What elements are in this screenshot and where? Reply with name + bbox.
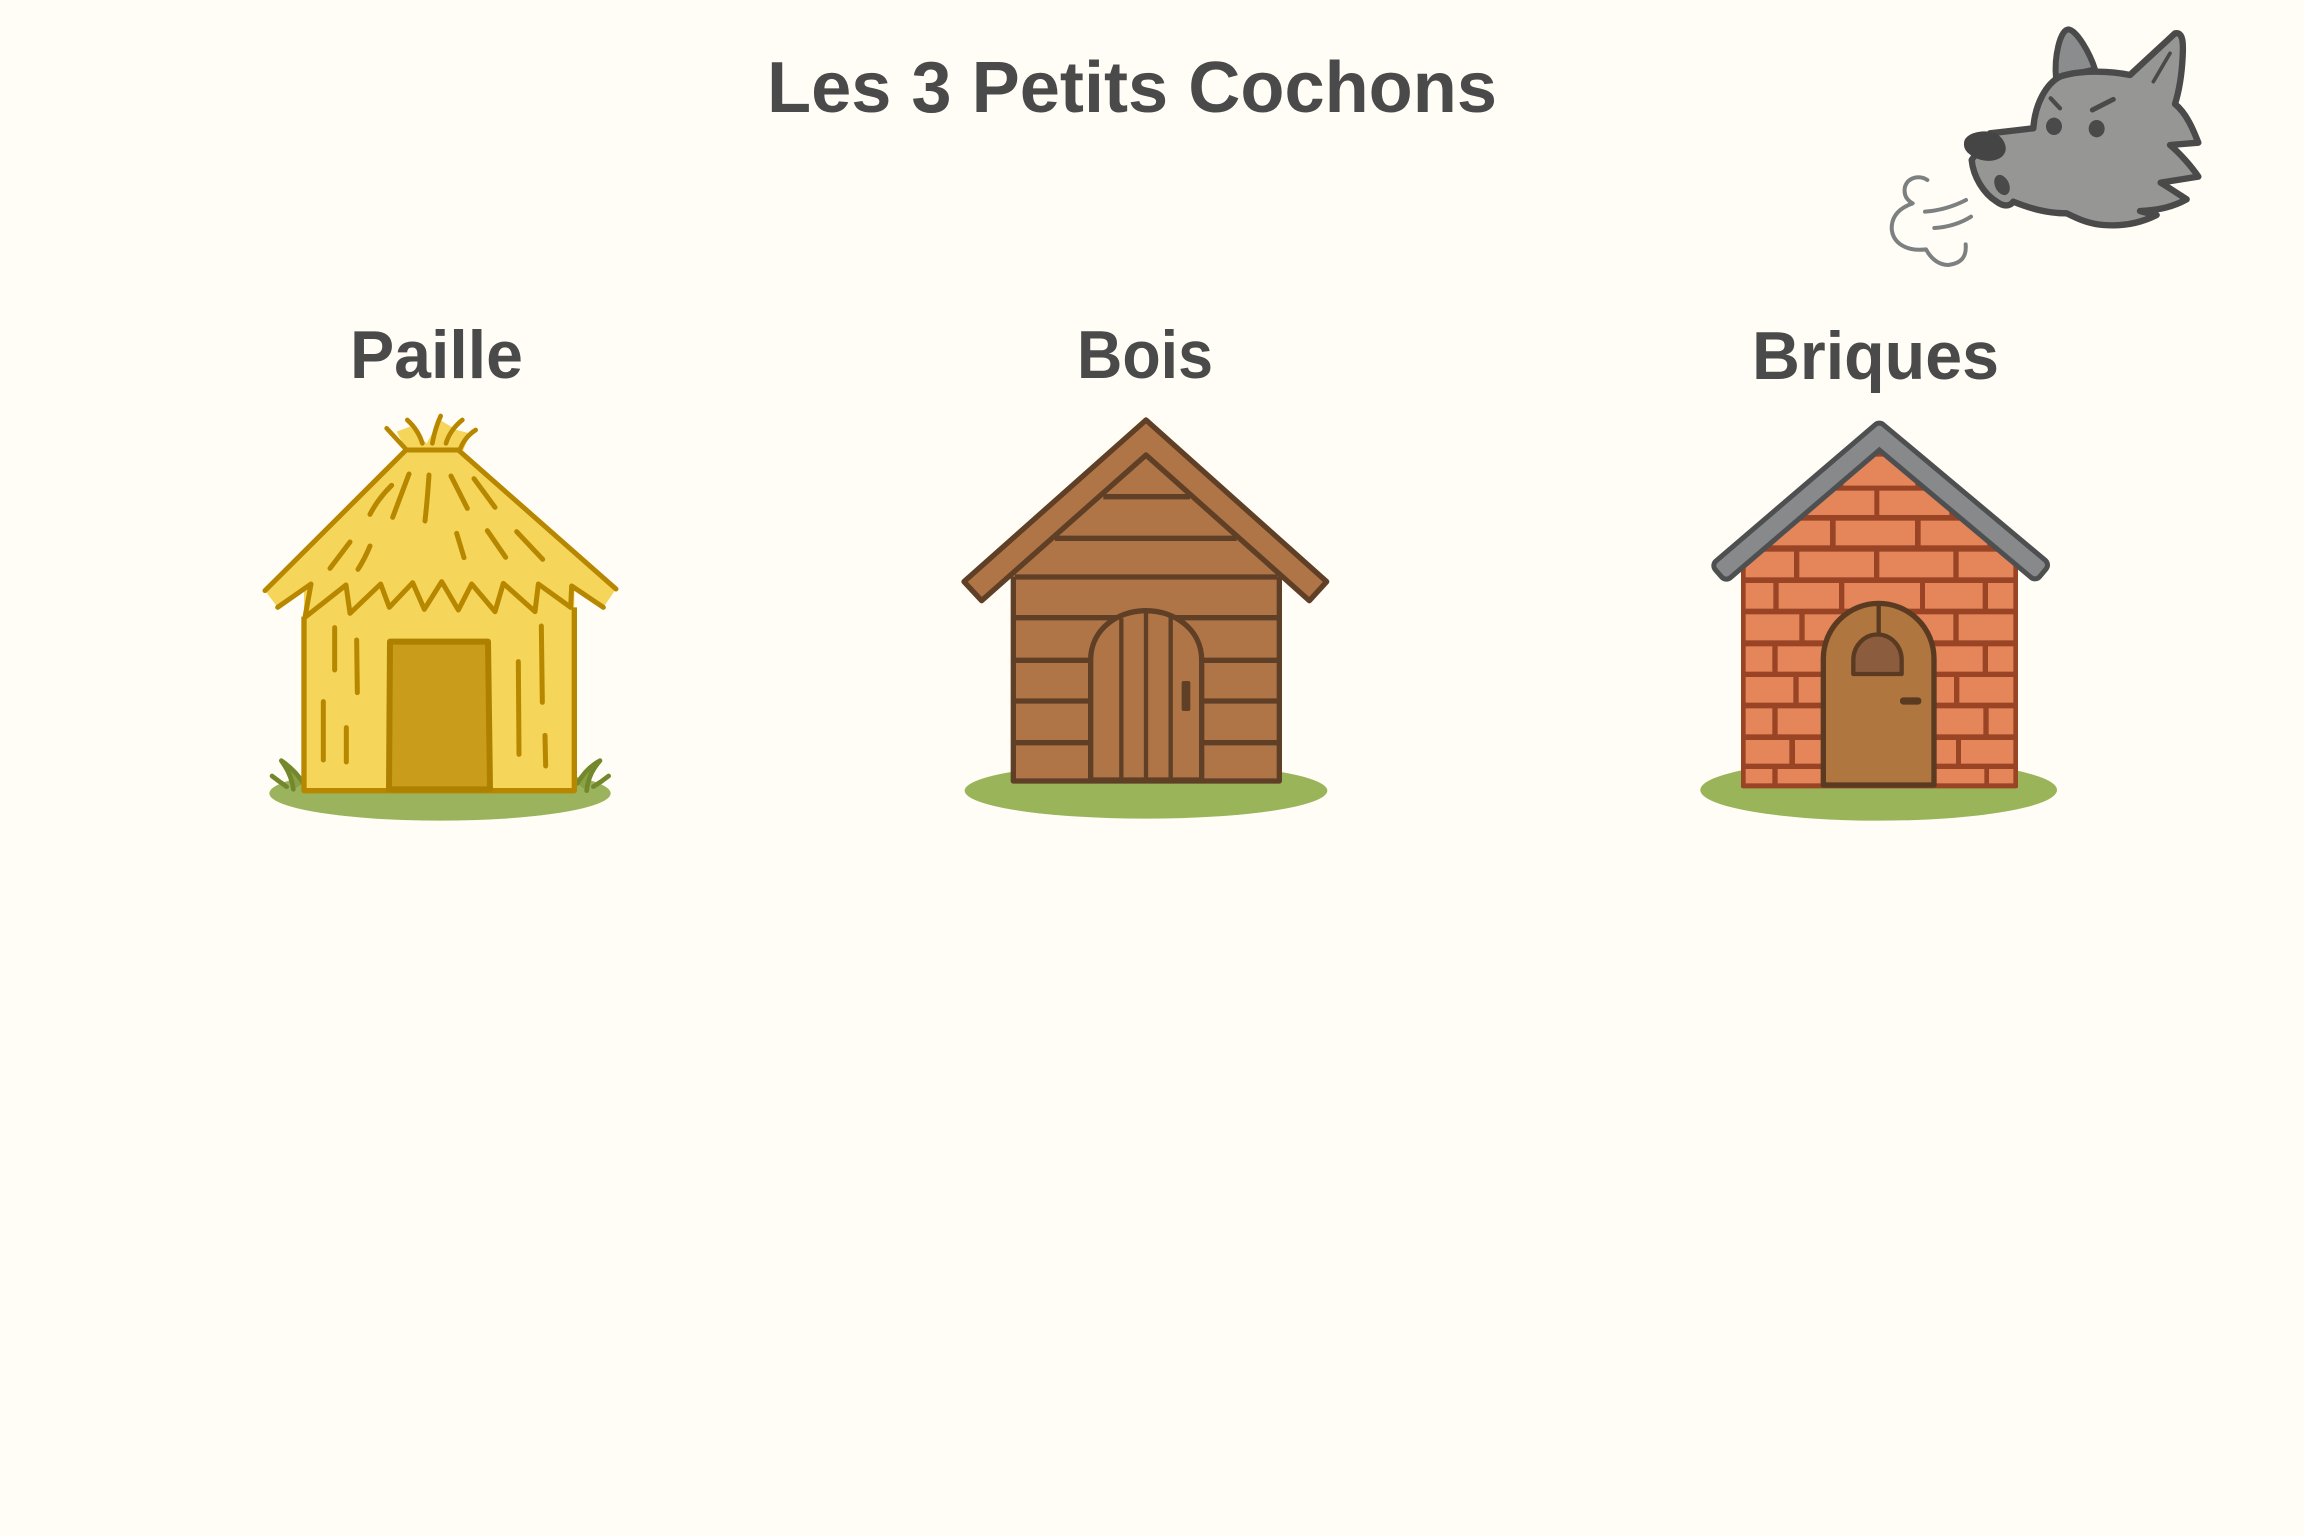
breath of wind <box>1892 177 1971 265</box>
wolf mouth <box>1991 172 2013 198</box>
grass tufts <box>272 761 609 791</box>
grey roof <box>1720 429 2041 573</box>
wood wall <box>1013 577 1279 781</box>
ground <box>1700 759 2057 821</box>
ground <box>965 763 1327 819</box>
ground <box>269 766 611 821</box>
brick door <box>1823 603 1934 785</box>
gable <box>1003 447 1289 577</box>
brick house <box>1700 429 2057 821</box>
straw door <box>389 642 490 789</box>
heading: Briques: Briques <box>1752 318 1999 394</box>
heading: Bois: Bois <box>1077 317 1213 393</box>
thatch roof <box>265 416 616 617</box>
wolf eyes <box>2046 118 2105 137</box>
planks <box>1013 497 1279 743</box>
bricks <box>1746 457 2013 783</box>
wolf head <box>1972 33 2198 225</box>
brick wall <box>1741 443 2018 788</box>
title: Les 3 Petits Cochons <box>767 48 1497 128</box>
wolf back ear <box>2056 29 2095 78</box>
heading: Paille: Paille <box>350 317 523 393</box>
wood house <box>964 420 1327 819</box>
wood roof <box>964 420 1327 601</box>
wood door <box>1091 611 1202 780</box>
straw wall <box>304 580 574 791</box>
wolf nose <box>1964 131 2006 161</box>
wolf brows <box>2051 53 2170 110</box>
straw house <box>265 416 616 821</box>
icon: wolf blowing <box>1892 29 2198 265</box>
straw strokes <box>323 474 546 766</box>
